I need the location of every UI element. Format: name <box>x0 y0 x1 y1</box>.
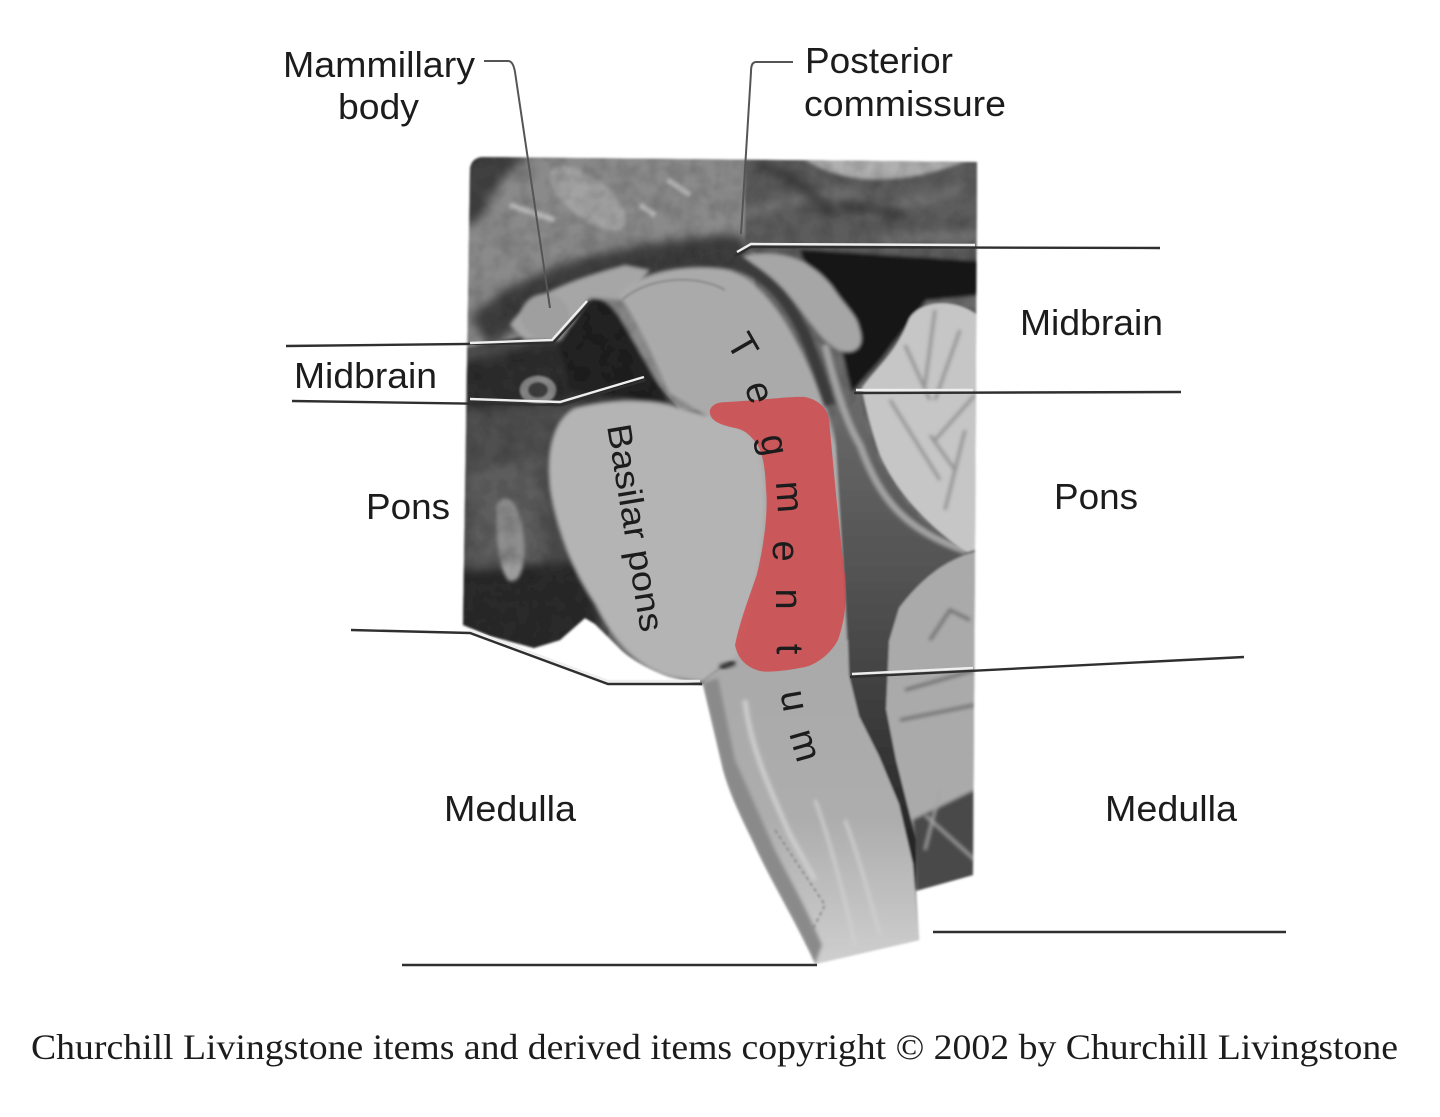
line: right medulla bottom <box>933 931 1286 933</box>
label: posterior: Posterior <box>805 40 953 81</box>
texture <box>466 158 976 640</box>
lower left dark tissue <box>463 326 678 636</box>
label: tegmentum: u <box>771 687 816 715</box>
label: medulla right: Medulla <box>1105 788 1238 829</box>
label: tegmentum: t <box>768 644 810 655</box>
copyright caption: Churchill Livingstone items and derived items copyright © 2002 by Churchill Livingstone <box>31 1027 1398 1067</box>
line: right pons boundary <box>850 657 1244 677</box>
label: tegmentum: g <box>751 431 796 459</box>
line highlights on photo <box>470 244 975 681</box>
label: tegmentum: m <box>780 724 829 766</box>
fourth ventricle floor <box>835 400 952 888</box>
label: tegmentum <box>718 326 829 766</box>
label: tegmentum: n <box>767 588 809 610</box>
photo background upper left <box>455 150 755 410</box>
aqueduct dark stripe <box>735 262 830 405</box>
label: midbrain right: Midbrain <box>1020 302 1163 343</box>
ventricle wall light stripe <box>825 345 966 551</box>
leader lines <box>286 61 1286 965</box>
label: midbrain left: Midbrain <box>294 355 437 396</box>
interpeduncular dark wedge <box>560 299 668 402</box>
lower left pale structure <box>496 498 524 581</box>
midbrain body <box>619 267 848 680</box>
photo base <box>606 251 978 937</box>
label: mammillary body: Mammillary <box>283 44 475 85</box>
label: pons right: Pons <box>1054 476 1138 517</box>
label: basilar pons: Basilar pons <box>599 421 671 635</box>
label: medulla left: Medulla <box>444 788 577 829</box>
label: commissure: commissure <box>804 83 1006 124</box>
line: left medulla bottom <box>402 964 817 966</box>
line: lower left midbrain <box>292 380 646 405</box>
label: tegmentum: e <box>764 540 806 562</box>
label: tegmentum: T <box>718 326 766 367</box>
lower cerebellum <box>886 552 975 891</box>
line: upper right midbrain <box>735 247 1160 256</box>
photograph: dissected brainstem <box>455 150 985 970</box>
line: mammillary body <box>484 61 550 308</box>
hypothalamic band with mammillary body <box>510 265 650 340</box>
label: tegmentum: e <box>736 376 782 409</box>
line: left pons boundary <box>351 630 702 684</box>
label: body: body <box>338 86 419 127</box>
photo background upper right <box>745 155 985 270</box>
line: posterior commissure <box>741 62 793 234</box>
medulla <box>703 640 919 964</box>
label: tegmentum: m <box>767 480 811 514</box>
basilar pons <box>549 401 764 682</box>
line: upper left midbrain <box>286 302 590 346</box>
highlight: tegmentum of the pons <box>710 397 846 672</box>
line: lower right midbrain <box>854 392 1181 393</box>
oculomotor ring vessel <box>520 376 556 404</box>
tectum <box>742 253 862 353</box>
upper cerebellum <box>862 303 977 552</box>
label: pons left: Pons <box>366 486 450 527</box>
dark recess behind tectum <box>800 250 985 392</box>
